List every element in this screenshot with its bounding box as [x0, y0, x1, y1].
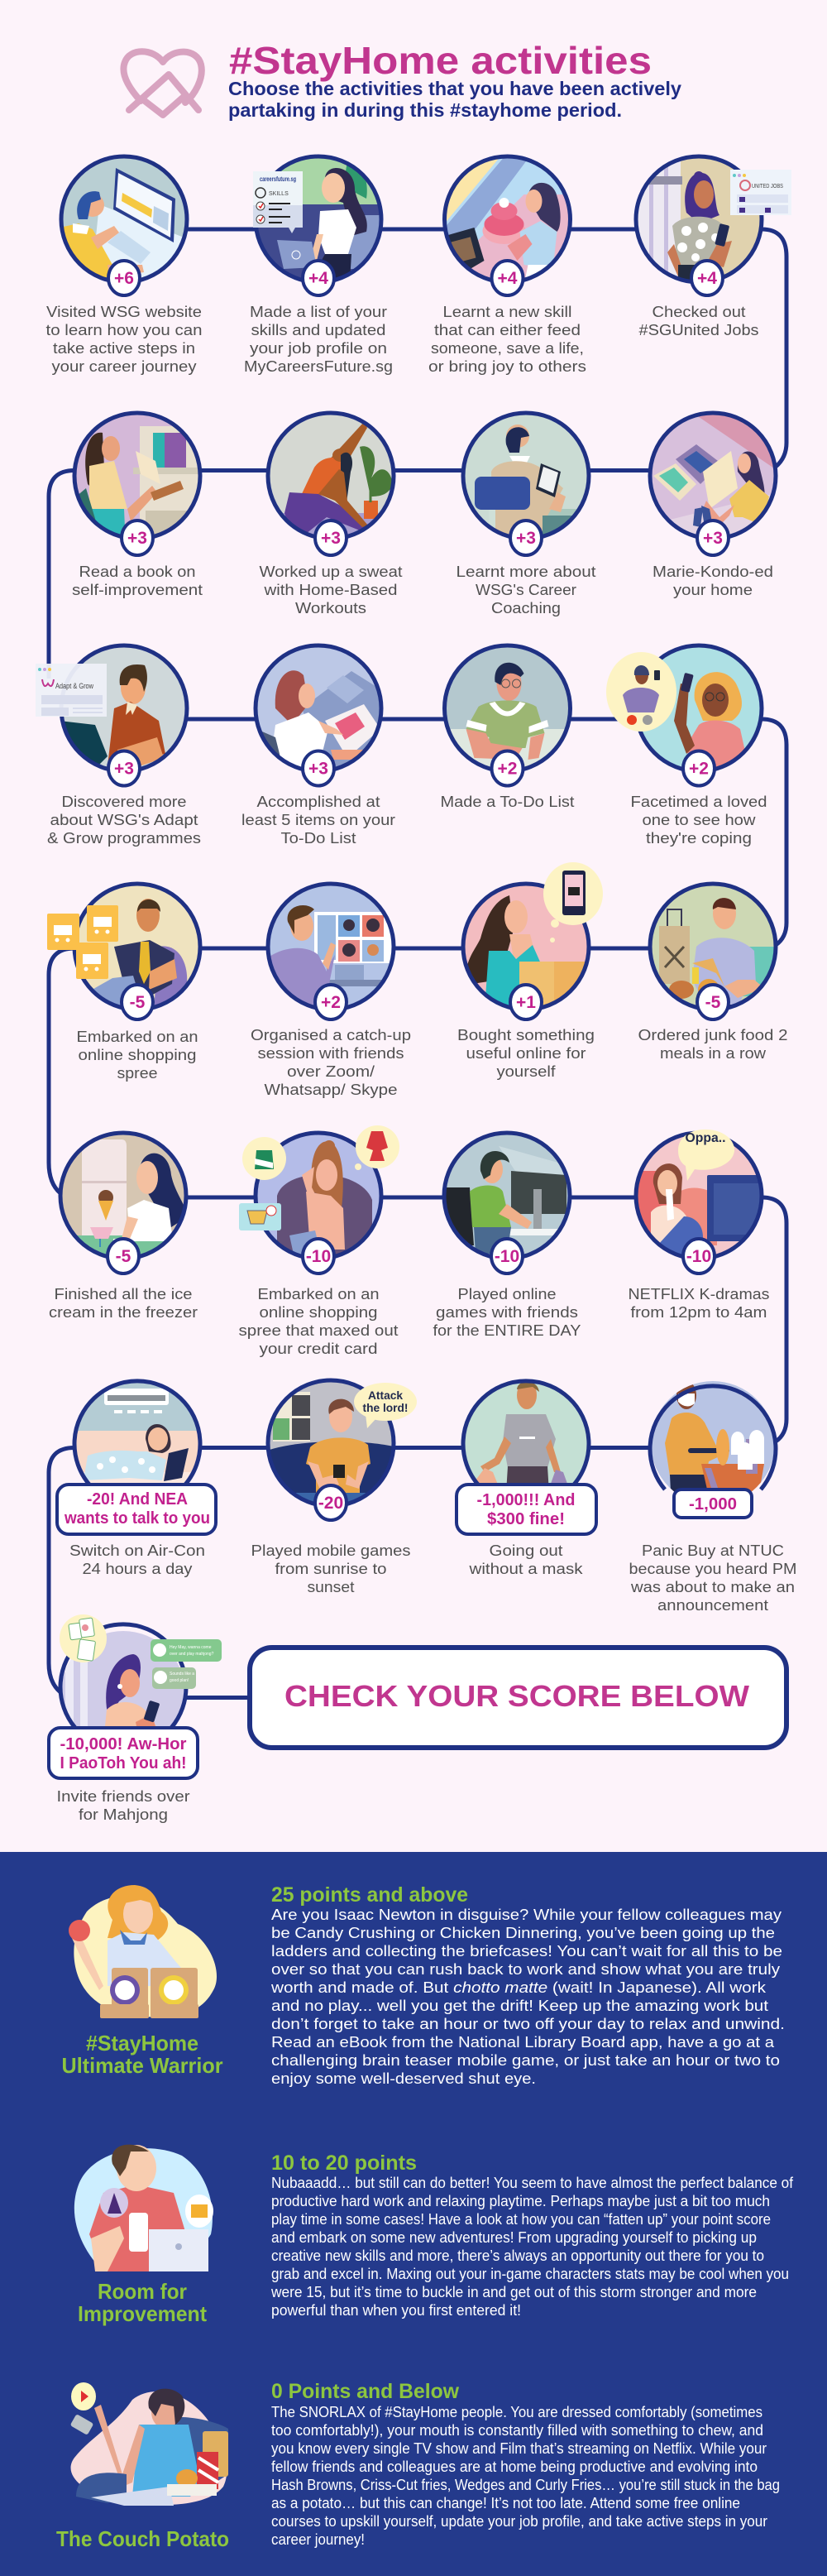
caption: Made a To-Do List	[440, 794, 574, 810]
score badge: +2	[689, 760, 709, 778]
caption: from 12pm to 4am	[630, 1304, 767, 1321]
score callout: I PaoToh You ah!	[60, 1754, 187, 1772]
caption: self-improvement	[72, 582, 203, 598]
activity: facetimed a loved one	[606, 642, 767, 847]
header	[123, 39, 681, 121]
activity: netflix K-dramas	[629, 1130, 769, 1321]
result name: Ultimate Warrior	[61, 2053, 223, 2078]
caption: Switch on Air-Con	[69, 1542, 205, 1559]
result heading: 10 to 20 points	[271, 2151, 417, 2175]
caption	[629, 1542, 797, 1614]
result description: Read an eBook from the National Library Board app, have a go at a	[271, 2034, 775, 2051]
illustration: man at computer	[58, 153, 190, 285]
caption: meals in a row	[660, 1045, 767, 1062]
activity: visited WSG website	[46, 153, 202, 375]
caption: #SGUnited Jobs	[638, 322, 759, 338]
score badge	[691, 261, 723, 295]
score badge: -20	[318, 1494, 343, 1513]
activity: air-con all day	[57, 1377, 216, 1577]
score badge: -5	[130, 993, 146, 1012]
activity: adapt and grow	[36, 642, 201, 847]
score badge: +3	[308, 760, 328, 778]
caption: Read a book on	[79, 564, 195, 580]
activity: home-based workouts	[260, 410, 402, 616]
score badge: -5	[116, 1247, 131, 1266]
subtitle	[228, 78, 681, 121]
caption	[428, 304, 586, 375]
caption: over Zoom/	[287, 1063, 375, 1080]
caption: they're coping	[646, 830, 752, 847]
caption	[251, 1027, 411, 1098]
popout: phone shopping bubble	[543, 862, 603, 925]
activity: read a book	[71, 410, 206, 598]
caption	[468, 1542, 584, 1577]
result description	[270, 2175, 794, 2319]
popout: bubbles for bag, dress and cart	[239, 1125, 399, 1230]
illustration outline	[650, 1386, 776, 1489]
caption: Played mobile games	[251, 1542, 410, 1559]
score badge: +3	[516, 529, 536, 548]
result description: The SNORLAX of #StayHome people. You are dressed comfortably (sometimes	[271, 2404, 762, 2420]
caption	[56, 1788, 190, 1823]
activity: invite friends for mahjong	[49, 1614, 222, 1823]
caption: Ordered junk food 2	[638, 1027, 787, 1043]
result name: The Couch Potato	[56, 2526, 229, 2551]
result description: as a potato… but this can change! It’s not too late. Attend some free online	[271, 2495, 740, 2511]
caption: Embarked on an	[258, 1286, 379, 1302]
score callout	[457, 1485, 596, 1534]
score badge: +4	[697, 269, 717, 288]
caption: MyCareersFuture.sg	[244, 358, 393, 375]
activity: list of skills	[244, 153, 393, 375]
icon: heart and house logo	[123, 51, 202, 115]
caption: & Grow programmes	[47, 830, 201, 847]
score badge	[303, 751, 334, 786]
result description: don’t forget to take an hour or two off your day to relax and unwind.	[271, 2016, 785, 2032]
illustration: man with glasses writing	[442, 642, 574, 779]
caption: about WSG's Adapt	[50, 812, 198, 828]
caption	[72, 564, 203, 598]
popout: MyCareersFuture skills panel: careersfuture.sg	[260, 175, 296, 183]
activity: going out without mask	[457, 1377, 596, 1577]
score badge	[303, 261, 334, 295]
caption: was about to make an	[630, 1579, 795, 1595]
caption: Panic Buy at NTUC	[642, 1542, 784, 1559]
illustration: woman reading under air-con	[71, 1377, 203, 1509]
caption: Worked up a sweat	[260, 564, 402, 580]
illustration: woman with phone	[633, 153, 791, 290]
result description: were 15, but it’s time to buckle in and get out of this storm stronger and more	[270, 2284, 757, 2300]
score badge: +3	[127, 529, 147, 548]
illustration: gamer at desk	[441, 1130, 573, 1262]
illustration: woman with laptop on sofa	[252, 153, 385, 287]
popout: MyCareersFuture skills panel: SKILLS	[269, 191, 289, 197]
illustration: woman with parcel	[460, 862, 603, 1013]
result description: be Candy Crushing or Chicken Dinnering, you’ve been going up the	[271, 1925, 775, 1941]
caption: sunset	[308, 1579, 354, 1595]
caption: to learn how you can	[46, 322, 202, 338]
caption: Finished all the ice	[55, 1286, 192, 1302]
caption: someone, save a life,	[431, 340, 584, 357]
score badge	[510, 520, 542, 555]
illustration: ultimate warrior woman with briefcases	[69, 1885, 217, 2018]
result name: Room for	[98, 2279, 187, 2304]
activity: learnt a new skill	[428, 153, 586, 375]
result description	[271, 2404, 780, 2548]
caption: Facetimed a loved	[630, 794, 767, 810]
caption: online shopping	[260, 1304, 377, 1321]
caption: Learnt a new skill	[443, 304, 572, 320]
caption: Coaching	[491, 600, 561, 616]
activity: online games	[433, 1130, 581, 1339]
activity: WSG career coaching	[457, 410, 595, 616]
caption: Invite friends over	[56, 1788, 190, 1805]
caption: because you heard PM	[629, 1561, 797, 1577]
illustration: man playing phone	[265, 1377, 417, 1509]
illustration: man reading tablet	[460, 410, 592, 543]
caption	[238, 1286, 399, 1357]
caption: Learnt more about	[457, 564, 595, 580]
subtitle: partaking in during this #stayhome period.	[228, 99, 622, 121]
result description: you know every single TV show and Film that’s streaming on Netflix. While your	[271, 2440, 767, 2457]
illustration: man with laptop	[36, 642, 190, 783]
activity: made to-do list	[440, 642, 574, 810]
popout: chat bubbles: Sounds like a	[170, 1672, 194, 1677]
score badge: +4	[308, 269, 328, 288]
caption	[69, 1542, 205, 1577]
caption: with Home-Based	[263, 582, 397, 598]
caption: Played online	[458, 1286, 556, 1302]
caption: from sunrise to	[275, 1561, 387, 1577]
activity: online shopping spree	[47, 880, 203, 1082]
popout: MyCareersFuture skills panel	[253, 171, 303, 233]
score badge: -5	[705, 993, 721, 1012]
result description: creative new skills and more, there’s always an opportunity out there for you to	[271, 2247, 764, 2264]
score badge: +1	[516, 993, 536, 1012]
score callout: -20! And NEA	[87, 1490, 188, 1509]
caption: games with friends	[436, 1304, 578, 1321]
score badge	[315, 985, 347, 1019]
result description: and no play... well you get the drift! Keep up the amazing work but	[271, 1998, 768, 2014]
illustration: woman writing list	[252, 642, 385, 775]
illustration: woman on armchair	[239, 1125, 399, 1262]
score badge	[122, 985, 153, 1019]
illustration: woman reading by bookshelf	[71, 410, 206, 546]
popout: Attack the lord speech bubble	[354, 1383, 417, 1428]
popout: Oppa speech bubble	[678, 1130, 734, 1181]
score badge	[510, 985, 542, 1019]
activity: checked out SGUnited Jobs	[633, 153, 791, 338]
caption: To-Do List	[281, 830, 356, 847]
score badge: +3	[703, 529, 723, 548]
score badge: -10	[686, 1247, 711, 1266]
result description: too comfortably!), your mouth is constantly filled with something to chew, and	[271, 2422, 763, 2439]
result name	[78, 2279, 207, 2326]
score callout	[674, 1489, 752, 1518]
score badge: +4	[498, 269, 518, 288]
caption: for Mahjong	[79, 1806, 168, 1823]
popout: mahjong tile bubble	[60, 1614, 107, 1662]
result description: challenging brain teaser mobile game, or just take an hour or two to	[271, 2052, 780, 2069]
illustration: man with bags without mask	[460, 1377, 592, 1509]
caption	[457, 564, 595, 616]
caption: WSG's Career	[476, 582, 576, 598]
score callout	[57, 1485, 216, 1534]
caption	[629, 1286, 769, 1321]
score badge	[697, 520, 729, 555]
score badge	[683, 751, 715, 786]
score callout: -1,000!!! And	[476, 1491, 576, 1509]
caption: Organised a catch-up	[251, 1027, 411, 1043]
illustration: woman stretching	[265, 410, 397, 546]
call to action: check your score	[250, 1648, 786, 1748]
score badge: -10	[495, 1247, 519, 1266]
connector path between activities	[49, 229, 786, 1698]
score badge: +2	[321, 993, 341, 1012]
caption: Discovered more	[61, 794, 187, 810]
caption	[241, 794, 395, 847]
score badge	[491, 261, 523, 295]
score badge: -10	[306, 1247, 331, 1266]
title: #StayHome activities	[229, 39, 652, 82]
caption: session with friends	[258, 1045, 404, 1062]
activity: credit card spree	[238, 1125, 399, 1357]
score badge	[315, 1485, 347, 1520]
caption	[638, 1027, 787, 1062]
caption	[49, 1286, 198, 1321]
score badge: +3	[321, 529, 341, 548]
score badge	[108, 261, 140, 295]
score badge	[683, 1239, 715, 1274]
result description: over so that you can rush back to work and show what you are truly	[271, 1961, 780, 1978]
illustration: couch potato	[70, 2382, 228, 2506]
popout: Oppa speech bubble: Oppa..	[685, 1131, 726, 1145]
caption	[46, 304, 202, 375]
result description: and embark on some new adventures! From upgrading yourself to picking up	[271, 2229, 757, 2246]
illustration: woman on video call	[606, 642, 765, 775]
caption: Accomplished at	[256, 794, 380, 810]
caption: spree	[117, 1065, 157, 1082]
caption: Marie-Kondo-ed	[653, 564, 773, 580]
result description: worth and made of. But chotto matte (wait! In Japanese). All work	[270, 1979, 767, 1996]
caption: Workouts	[295, 600, 366, 616]
subtitle: Choose the activities that you have been actively	[228, 78, 681, 99]
result heading: 0 Points and Below	[271, 2380, 460, 2403]
popout: Attack the lord speech bubble: Attack	[368, 1389, 403, 1402]
score badge	[491, 751, 523, 786]
call to action: check your score: CHECK YOUR SCORE BELOW	[284, 1679, 749, 1713]
activity: catch-up session with friends	[251, 880, 411, 1098]
popout: SGUnited Jobs panel	[730, 170, 791, 215]
popout: Adapt and Grow panel	[36, 664, 107, 717]
popout: Attack the lord speech bubble: the lord!	[362, 1401, 409, 1414]
popout: SGUnited Jobs panel: UNITED JOBS	[752, 182, 783, 189]
score badge	[108, 1239, 139, 1274]
activity: panic buy	[629, 1377, 797, 1614]
result description: courses to upskill yourself, update your job profile, and take active steps in your	[271, 2513, 767, 2530]
illustration: man with phone and laptop	[74, 2145, 213, 2271]
score badge	[697, 985, 729, 1019]
caption: online shopping	[78, 1047, 197, 1063]
caption	[433, 1286, 581, 1339]
illustration: woman tidying boxes	[647, 410, 779, 542]
result description: career journey!	[271, 2531, 365, 2548]
caption: least 5 items on your	[241, 812, 395, 828]
result: 25 points and above	[61, 1883, 785, 2087]
caption: one to see how	[642, 812, 757, 828]
result: 10 to 20 points	[74, 2145, 794, 2326]
score badge: +2	[498, 760, 517, 778]
caption: yourself	[496, 1063, 557, 1080]
score badge	[108, 751, 140, 786]
illustration outline	[60, 1624, 186, 1728]
score badge: +6	[114, 269, 134, 288]
panel: score results	[0, 1852, 827, 2576]
popout: chat bubbles: over and play mahjong?	[170, 1652, 214, 1657]
score badge: +3	[114, 760, 134, 778]
score callout: $300 fine!	[487, 1510, 565, 1528]
popout: chat bubbles	[151, 1639, 222, 1689]
result name: #StayHome	[86, 2031, 198, 2056]
score callout: -1,000	[689, 1495, 737, 1513]
caption: skills and updated	[251, 322, 385, 338]
result description	[270, 1907, 785, 2087]
caption: cream in the freezer	[49, 1304, 198, 1321]
caption: Visited WSG website	[46, 304, 202, 320]
activity: finished the ice cream	[49, 1130, 198, 1321]
illustration: man on video conference	[265, 880, 397, 1013]
score badge	[315, 520, 347, 555]
caption	[457, 1027, 595, 1080]
activity: Marie-Kondo	[647, 410, 779, 598]
illustration outline	[74, 1381, 200, 1485]
caption: or bring joy to others	[428, 358, 586, 375]
caption	[260, 564, 402, 616]
result description: enjoy some well-deserved shut eye.	[271, 2070, 536, 2087]
score badge	[122, 520, 153, 555]
popout: Adapt and Grow panel: Adapt & Grow	[55, 682, 93, 690]
activity: mobile games	[251, 1377, 417, 1595]
result description: Hash Browns, Criss-Cut fries, Wedges and Curly Fries… you’re still stuck in the bag	[271, 2477, 780, 2493]
activity: bought something useful	[457, 862, 603, 1080]
result description: play time in some cases! Have a look at how you can “fatten up” your point score	[271, 2211, 771, 2228]
illustration: woman texting	[57, 1627, 189, 1759]
caption: Bought something	[457, 1027, 595, 1043]
result name: Improvement	[78, 2301, 207, 2326]
caption	[653, 564, 773, 598]
caption: that can either feed	[434, 322, 581, 338]
caption: spree that maxed out	[238, 1322, 399, 1339]
activity: ordered junk food	[638, 880, 787, 1062]
result description: Are you Isaac Newton in disguise? While your fellow colleagues may	[271, 1907, 782, 1923]
illustration: woman with ice cream	[57, 1130, 189, 1264]
caption: Whatsapp/ Skype	[265, 1082, 397, 1098]
caption	[244, 304, 393, 375]
caption: 24 hours a day	[83, 1561, 192, 1577]
illustration: man pushing trolley	[647, 1377, 779, 1509]
caption: your job profile on	[250, 340, 387, 357]
illustration: man eating pizza	[647, 880, 779, 1017]
caption: Going out	[490, 1542, 562, 1559]
caption	[47, 794, 201, 847]
caption: Embarked on an	[76, 1029, 198, 1045]
illustration: woman crying at TV	[633, 1130, 765, 1262]
caption: your credit card	[260, 1341, 377, 1357]
caption	[630, 794, 767, 847]
illustration: woman baking a cake	[442, 153, 574, 285]
caption: without a mask	[468, 1561, 584, 1577]
illustration: man with tie on laptop	[47, 880, 203, 1013]
caption: announcement	[657, 1597, 768, 1614]
score callout	[49, 1728, 198, 1778]
caption	[638, 304, 759, 338]
score callout: -10,000! Aw-Hor	[60, 1735, 187, 1753]
caption: Made a list of your	[250, 304, 387, 320]
result: 0 points and below	[56, 2380, 780, 2551]
score badge	[303, 1239, 334, 1274]
popout: chat bubbles: good plan!	[170, 1678, 189, 1683]
result description: productive hard work and relaxing playtime. Perhaps maybe just a bit too much	[271, 2193, 770, 2209]
popout: chat bubbles: Hey May, wanna come	[170, 1645, 212, 1650]
result description: grab and excel in. Maxing out your in-game characters stats may be cool when you	[271, 2266, 789, 2282]
score callout: wants to talk to you	[64, 1509, 210, 1528]
score badge	[491, 1239, 523, 1274]
result heading: 25 points and above	[271, 1883, 468, 1907]
result description: Nubaaadd… but still can do better! You seem to have almost the perfect balance of	[271, 2175, 794, 2191]
activity: accomplished to-do items	[241, 642, 395, 847]
popout: video call bubble	[606, 652, 676, 732]
result name	[61, 2031, 223, 2078]
caption: your career journey	[51, 358, 197, 375]
result description: fellow friends and colleagues are at home being productive and evolving into	[271, 2458, 758, 2475]
popout: shopping cart tags	[47, 905, 118, 979]
caption: NETFLIX K-dramas	[629, 1286, 769, 1302]
caption	[251, 1542, 410, 1595]
caption: take active steps in	[53, 340, 195, 357]
caption: for the ENTIRE DAY	[433, 1322, 581, 1339]
caption: useful online for	[466, 1045, 586, 1062]
caption: your home	[673, 582, 753, 598]
caption: Checked out	[652, 304, 746, 320]
result description: powerful than when you first entered it!	[271, 2302, 521, 2319]
result description: ladders and collecting the briefcases! You can’t wait for all this to be	[271, 1943, 782, 1960]
illustration outline	[463, 1381, 589, 1485]
caption	[76, 1029, 198, 1082]
